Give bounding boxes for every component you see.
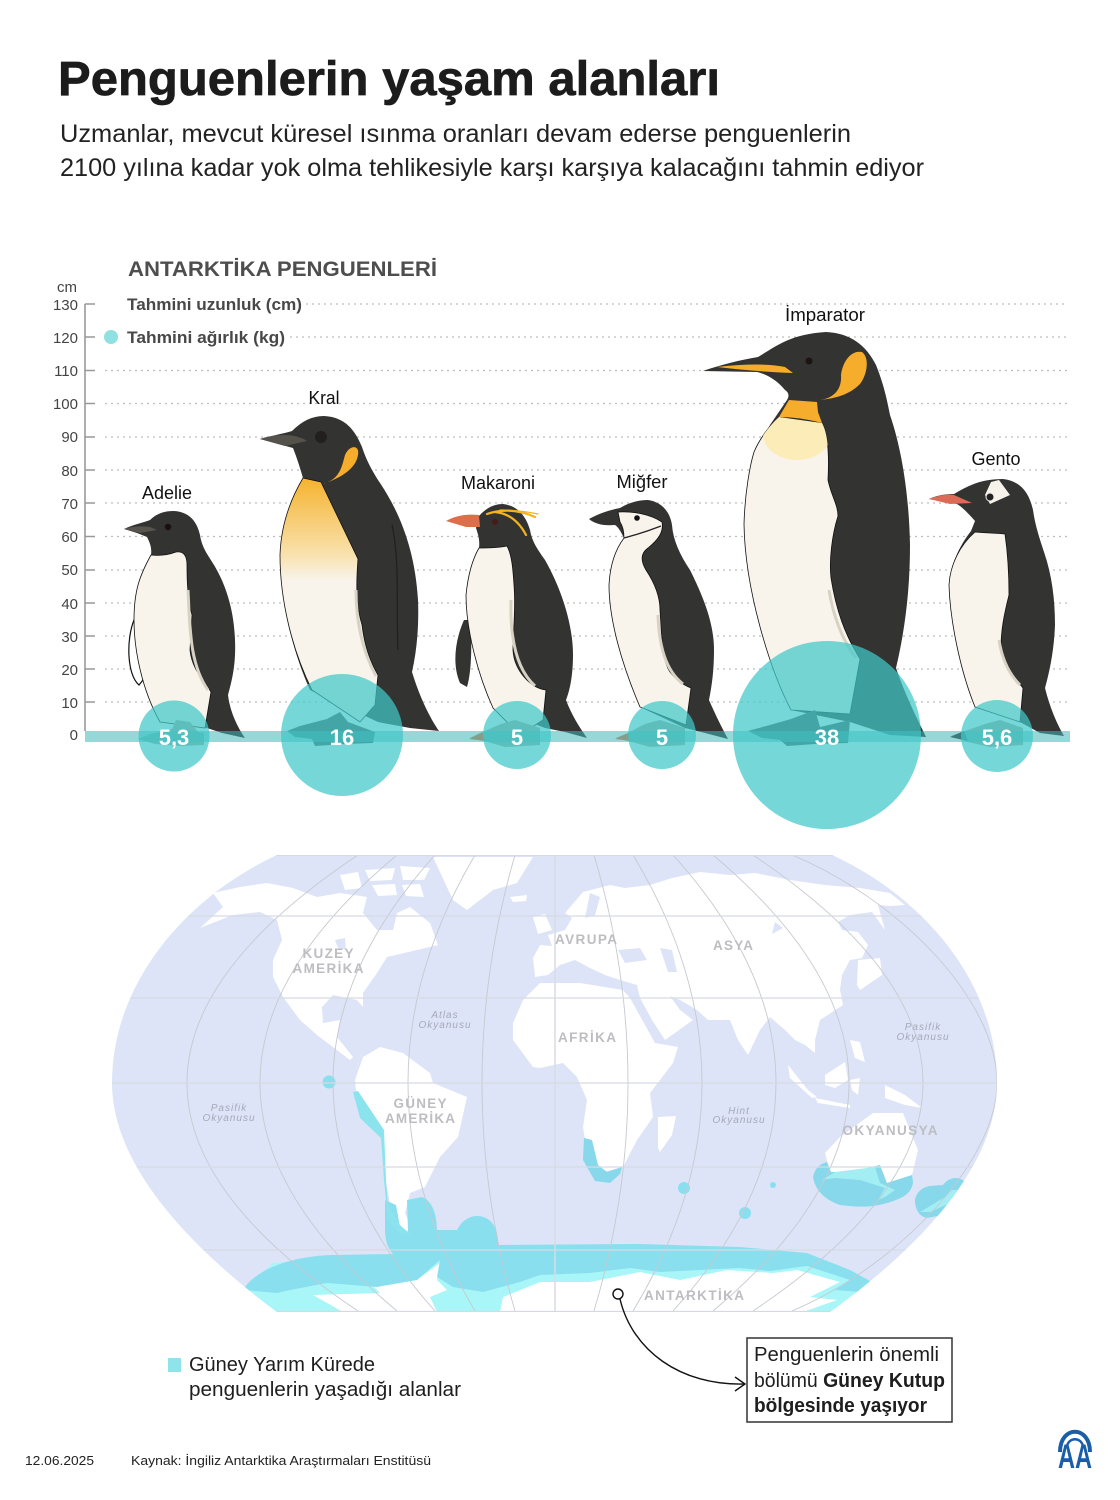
callout: bölgesinde yaşıyor	[754, 1395, 927, 1417]
legend: length and weight: Tahmini uzunluk (cm)	[127, 295, 302, 314]
continent labels: AMERİKA	[292, 961, 364, 976]
map legend: Güney Yarım Kürede	[189, 1353, 375, 1376]
ocean labels	[202, 1010, 950, 1126]
penguin: Kral	[260, 416, 439, 746]
subtitle	[60, 120, 924, 182]
callout: Penguenlerin önemli	[754, 1344, 939, 1366]
weight values: 5	[511, 725, 523, 750]
continent labels: OKYANUSYA	[842, 1123, 938, 1138]
continent labels: KUZEY	[302, 946, 354, 961]
ocean labels: Pasifik	[905, 1022, 941, 1033]
axis with gridlines: 110	[54, 363, 78, 380]
ocean labels: Atlas	[430, 1010, 459, 1021]
ocean labels: Hint	[728, 1106, 750, 1117]
legend: length and weight: Tahmini ağırlık (kg)	[127, 328, 285, 347]
chart heading: ANTARKTİKA PENGUENLERİ	[128, 258, 437, 281]
map legend	[168, 1353, 461, 1401]
penguin names: Makaroni	[461, 473, 535, 493]
axis with gridlines: 120	[53, 330, 78, 347]
continent labels: AFRİKA	[558, 1030, 616, 1045]
axis with gridlines: 90	[61, 429, 78, 446]
penguin: Adelie	[124, 511, 245, 746]
penguin names: Adelie	[142, 483, 192, 503]
penguin names: Gento	[972, 449, 1020, 469]
weight bubbles	[138, 641, 1033, 829]
axis with gridlines: 100	[53, 396, 78, 413]
penguin names	[142, 305, 1020, 503]
penguin habitat: cyan coastal zone	[246, 1260, 870, 1312]
subtitle: Uzmanlar, mevcut küresel ısınma oranları devam ederse penguenlerin	[60, 120, 851, 148]
continent labels: GÜNEY	[394, 1096, 446, 1111]
inland seas	[335, 893, 783, 972]
axis with gridlines: 10	[61, 695, 78, 712]
axis with gridlines: 70	[61, 496, 78, 513]
map legend: penguenlerin yaşadığı alanlar	[189, 1378, 461, 1401]
callout	[747, 1338, 952, 1422]
penguin habitat: teal zones	[243, 1197, 870, 1293]
axis with gridlines: 80	[61, 463, 78, 480]
axis with gridlines: 30	[61, 629, 78, 646]
weight values: 5,6	[982, 725, 1012, 750]
axis with gridlines: cm	[57, 279, 77, 296]
axis with gridlines: 50	[61, 562, 78, 579]
map grid	[187, 855, 923, 1311]
continents	[200, 857, 922, 1235]
weight values	[159, 725, 1012, 750]
penguin: Miğfer	[589, 500, 728, 747]
ocean labels: Okyanusu	[712, 1115, 766, 1126]
logo: AA: AA	[1058, 1438, 1092, 1476]
axis with gridlines: 60	[61, 529, 78, 546]
continent labels: ANTARKTİKA	[644, 1288, 744, 1303]
axis with gridlines: 130	[53, 297, 78, 314]
penguin names: İmparator	[785, 305, 865, 325]
continent labels: AVRUPA	[555, 932, 617, 947]
ocean labels: Okyanusu	[418, 1020, 472, 1031]
ocean labels: Pasifik	[211, 1103, 247, 1114]
weight values: 16	[330, 725, 354, 750]
title: Penguenlerin yaşam alanları	[58, 53, 720, 106]
baseline bar	[85, 731, 1070, 742]
date: 12.06.2025	[25, 1453, 94, 1468]
continent labels	[292, 932, 938, 1303]
source: Kaynak: İngiliz Antarktika Araştırmaları Enstitüsü	[131, 1453, 431, 1468]
weight values: 5,3	[159, 725, 189, 750]
weight values: 5	[656, 725, 668, 750]
axis with gridlines: 0	[70, 727, 78, 744]
callout: bölümü Güney Kutup	[754, 1370, 945, 1392]
Antarctica	[313, 1263, 840, 1312]
penguin: Makaroni	[446, 504, 587, 747]
continent labels: AMERİKA	[385, 1111, 455, 1126]
arrow from Antarctica to callout	[613, 1289, 745, 1391]
world map	[100, 850, 1010, 1320]
weight values: 38	[815, 725, 839, 750]
ocean labels: Okyanusu	[202, 1113, 256, 1124]
penguin: İmparator	[703, 332, 926, 746]
penguin names: Miğfer	[616, 472, 668, 492]
penguin names: Kral	[308, 388, 340, 408]
continent labels: ASYA	[713, 938, 753, 953]
logo: AA	[1058, 1432, 1092, 1476]
penguin: Gento	[929, 479, 1064, 747]
axis with gridlines	[53, 279, 1068, 744]
subtitle: 2100 yılına kadar yok olma tehlikesiyle karşı karşıya kalacağını tahmin ediyor	[60, 154, 924, 182]
axis with gridlines: 20	[61, 662, 78, 679]
legend: length and weight	[104, 295, 302, 347]
axis with gridlines: 40	[61, 596, 78, 613]
ocean labels: Okyanusu	[896, 1032, 950, 1043]
